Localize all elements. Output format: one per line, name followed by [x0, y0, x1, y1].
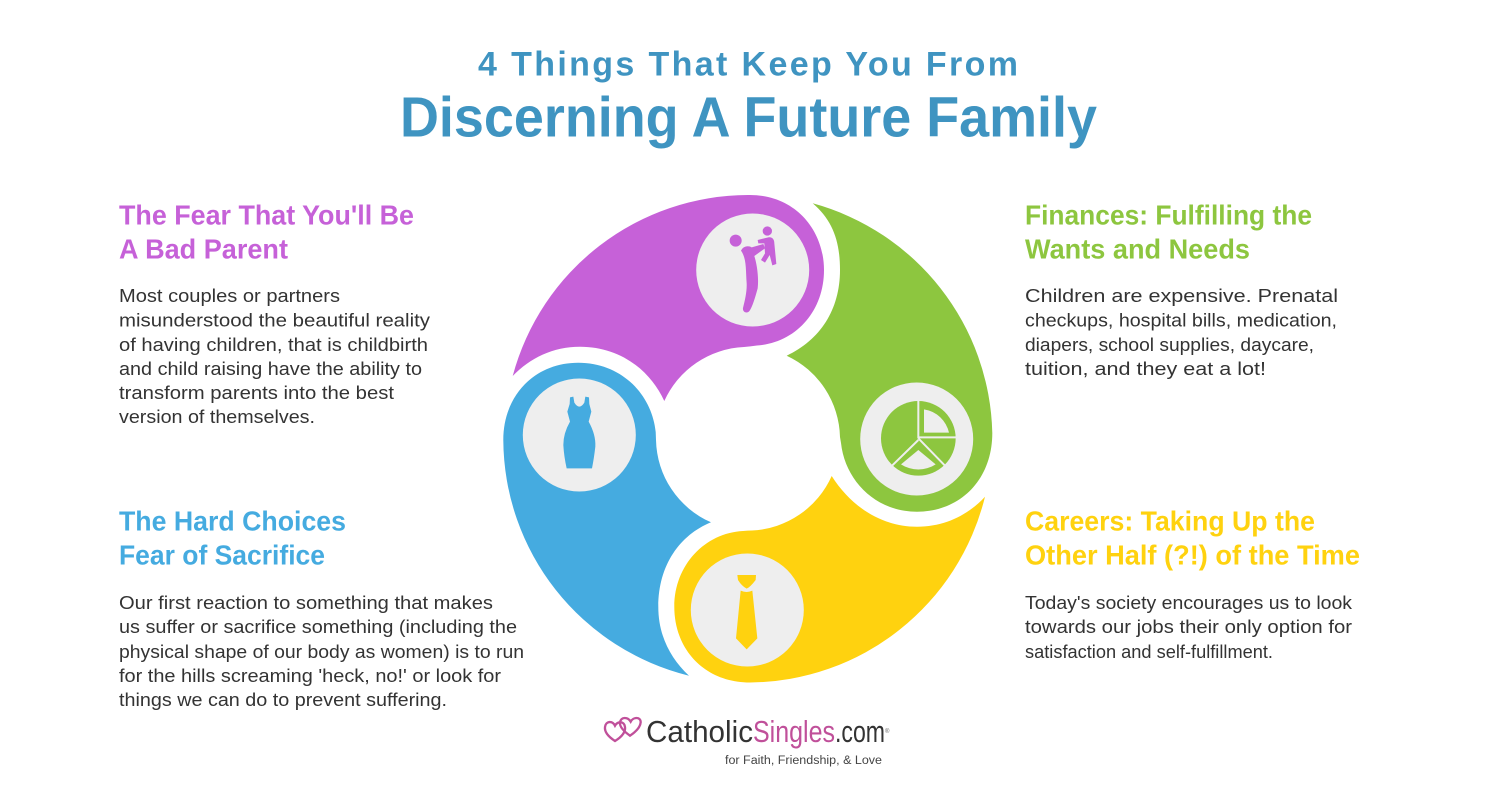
segment: blue — [503, 363, 711, 676]
text block: bad parent: version of themselves. — [119, 406, 315, 427]
logo: CatholicSingles.com: .com — [835, 714, 885, 749]
title — [400, 46, 1097, 150]
heading: careers — [1025, 506, 1360, 570]
title: Discerning A Future Family — [400, 86, 1097, 150]
heading: bad parent — [119, 200, 414, 264]
icon: dress — [563, 397, 595, 468]
segment: purple — [513, 195, 824, 401]
tagline: for Faith, Friendship, & Love — [725, 755, 882, 767]
heading: hard choices: The Hard Choices — [119, 506, 346, 536]
text block: finances — [1025, 285, 1338, 379]
text block: careers: towards our jobs their only option for — [1025, 616, 1352, 637]
icon disc: blue — [523, 378, 636, 492]
heading: finances: Finances: Fulfilling the — [1025, 200, 1312, 230]
segment: yellow — [674, 476, 985, 682]
icon disc: green — [860, 382, 973, 496]
icon: pie chart — [881, 400, 957, 476]
text block: hard choices: things we can do to prevent suffering. — [119, 689, 447, 710]
heading: hard choices — [119, 506, 346, 570]
text block: careers: satisfaction and self-fulfillment. — [1025, 641, 1273, 662]
title: 4 Things That Keep You From — [478, 46, 1018, 84]
heading: bad parent: The Fear That You'll Be — [119, 200, 414, 230]
text block: finances: checkups, hospital bills, medication, — [1025, 310, 1337, 330]
icon: parent lifting child — [730, 226, 776, 313]
text block: finances: Children are expensive. Prenatal — [1025, 285, 1338, 306]
panel: finances — [1025, 200, 1338, 379]
text block: hard choices: us suffer or sacrifice something (including the — [119, 616, 517, 637]
heading: careers: Other Half (?!) of the Time — [1025, 540, 1360, 570]
panel: hard choices — [119, 506, 524, 710]
logo: CatholicSingles.com — [605, 714, 890, 767]
panel: careers — [1025, 506, 1360, 662]
panel: fear of being a bad parent — [119, 200, 431, 427]
icon: necktie — [736, 575, 757, 649]
text block: careers — [1025, 592, 1353, 662]
text block: finances: tuition, and they eat a lot! — [1025, 358, 1266, 379]
logo: CatholicSingles.com: ® — [885, 728, 890, 735]
text block: bad parent: misunderstood the beautiful reality — [119, 310, 431, 330]
text block: careers: Today's society encourages us to look — [1025, 592, 1353, 613]
wordmark: Catholic — [646, 714, 753, 749]
segment: green — [787, 203, 992, 512]
heading: finances: Wants and Needs — [1025, 234, 1250, 264]
heading: finances — [1025, 200, 1312, 264]
text block: hard choices: for the hills screaming 'heck, no!' or look for — [119, 665, 501, 686]
icon disc: yellow — [691, 554, 804, 666]
text block: finances: diapers, school supplies, daycare, — [1025, 334, 1314, 355]
logo: CatholicSingles.com: Singles — [753, 714, 835, 749]
icon: interlocked hearts — [605, 718, 641, 741]
text block: hard choices: physical shape of our body as women) is to run — [119, 641, 524, 662]
text block: bad parent: and child raising have the ability to — [119, 358, 422, 379]
ring diagram — [503, 195, 992, 682]
text block: hard choices — [119, 592, 524, 710]
heading: bad parent: A Bad Parent — [119, 234, 288, 264]
heading: careers: Careers: Taking Up the — [1025, 506, 1315, 536]
text block: bad parent: transform parents into the best — [119, 382, 394, 403]
text block: bad parent: Most couples or partners — [119, 285, 340, 306]
text block: bad parent — [119, 285, 431, 427]
text block: hard choices: Our first reaction to something that makes — [119, 592, 493, 613]
icon disc: purple — [696, 214, 809, 326]
text block: bad parent: of having children, that is childbirth — [119, 334, 428, 355]
heading: hard choices: Fear of Sacrifice — [119, 540, 325, 570]
